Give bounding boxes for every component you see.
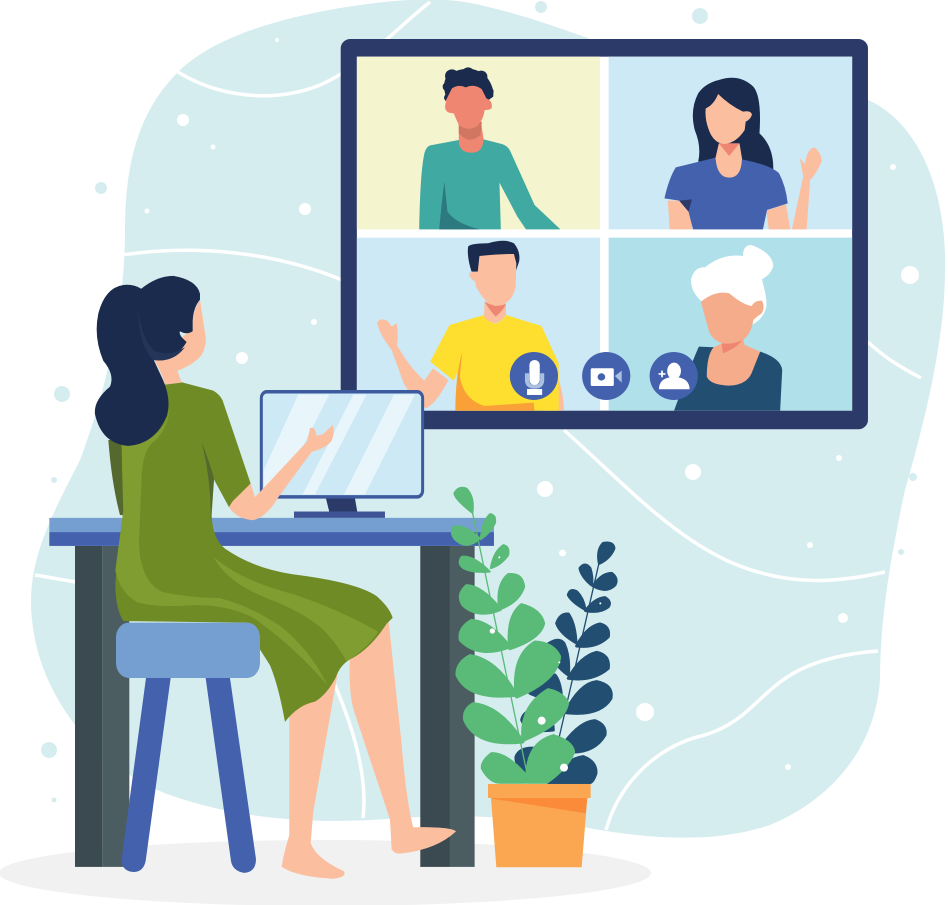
large video call monitor xyxy=(341,39,868,429)
front hair xyxy=(138,276,200,360)
desk xyxy=(49,518,494,867)
green leaves xyxy=(452,487,573,782)
icon: camera button xyxy=(582,352,630,400)
woman seated at desk xyxy=(95,276,456,879)
desk stool and small monitor xyxy=(49,276,494,879)
back shadow xyxy=(108,440,127,515)
ponytail xyxy=(95,285,169,446)
raised foot over desk leg xyxy=(392,827,456,854)
small desktop monitor xyxy=(261,392,423,518)
stool xyxy=(122,678,256,873)
head and neck xyxy=(155,300,206,385)
legs xyxy=(282,618,456,879)
participant: older woman with white hair xyxy=(674,245,782,411)
floor shadow xyxy=(0,840,651,905)
plant pot xyxy=(488,784,591,867)
participant: man in teal shirt xyxy=(419,67,560,229)
icon: add participant button xyxy=(650,352,698,400)
dress xyxy=(115,382,393,722)
stool seat xyxy=(116,623,260,678)
participant: woman in blue shirt xyxy=(664,78,822,229)
participant: man in yellow shirt xyxy=(377,241,564,411)
icon: microphone button xyxy=(510,352,558,400)
dark leaves xyxy=(516,543,616,783)
potted plant xyxy=(452,487,616,867)
arm raised to screen xyxy=(229,425,334,520)
white speckles on plant xyxy=(490,550,601,772)
